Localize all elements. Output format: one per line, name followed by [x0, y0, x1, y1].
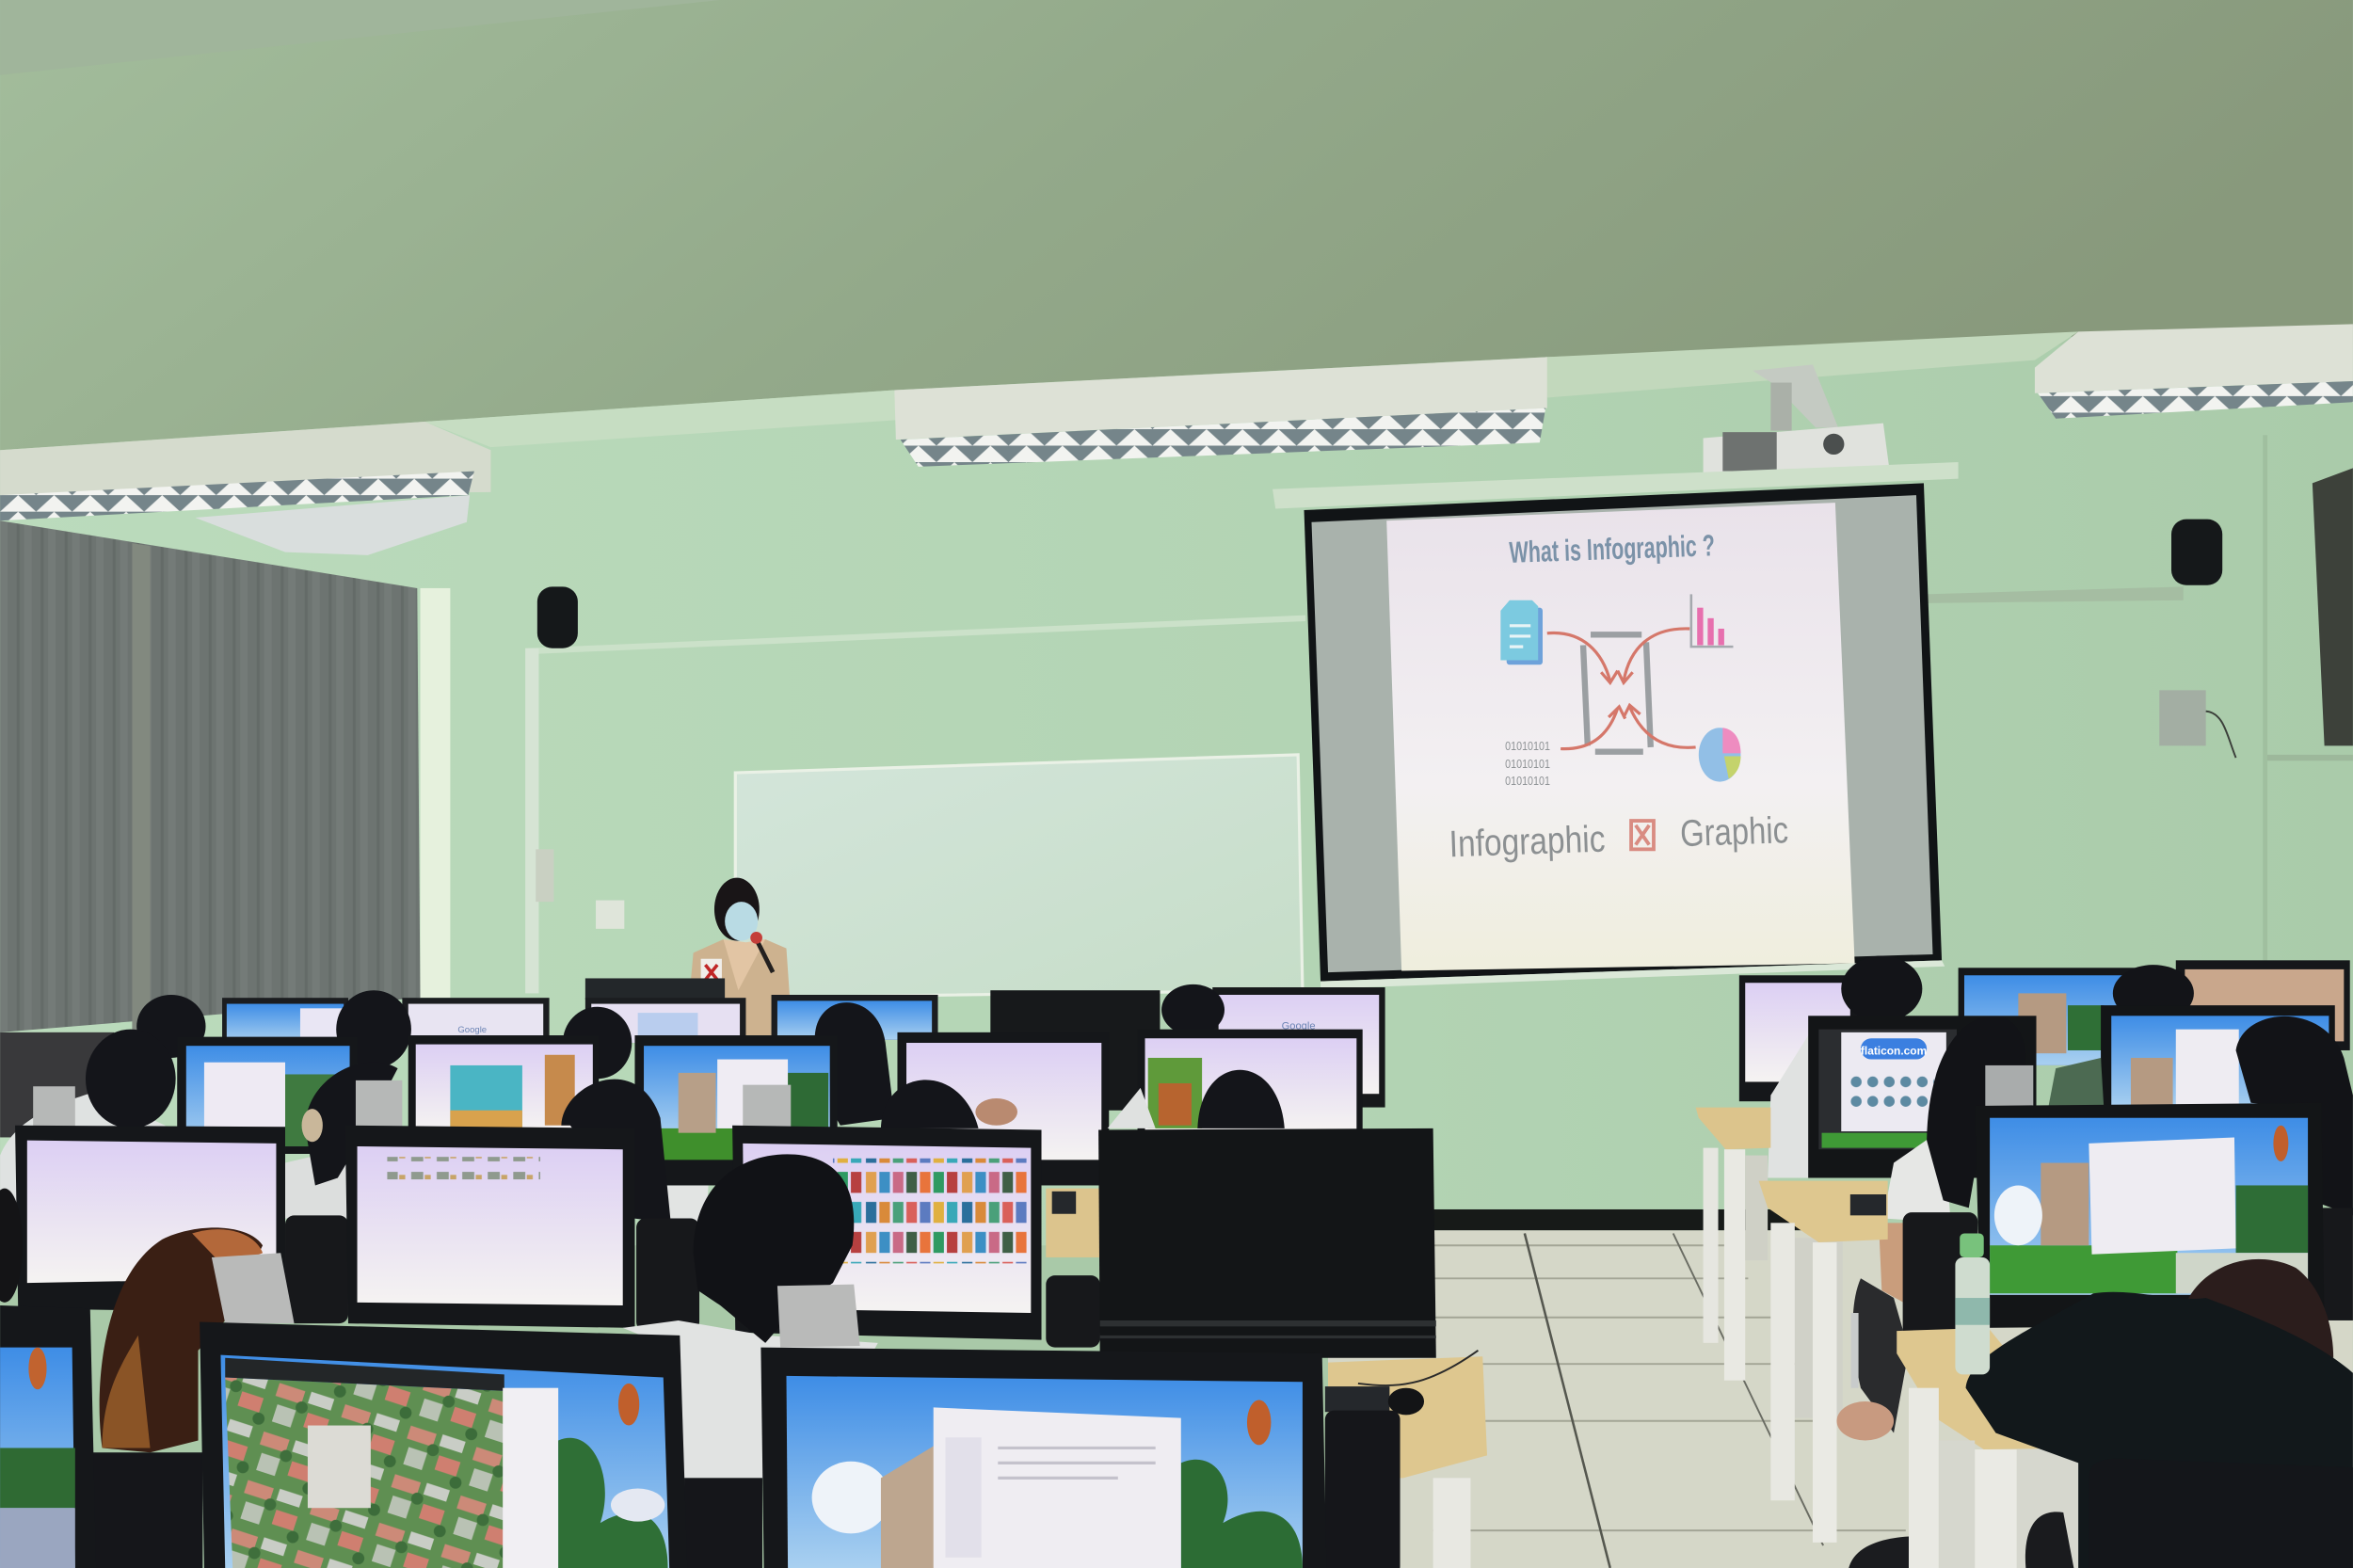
monitor A4: [772, 995, 938, 1040]
monitor R5: [2048, 1005, 2335, 1111]
keyboard: [1325, 1386, 1389, 1412]
row B students: [0, 1030, 1285, 1245]
monitor A1: [222, 998, 348, 1043]
slide label: Graphic: Graphic: [1679, 809, 1789, 855]
floor: [1328, 1230, 2353, 1568]
monitor A6 with Google page: Google: [1282, 1021, 1316, 1032]
head R2: [2113, 965, 2194, 1022]
back row students: [136, 984, 1225, 1126]
student in front of monitor C3: [623, 1154, 878, 1478]
right block back monitors: [1739, 956, 2350, 1177]
back row monitors: [0, 987, 1385, 1137]
curtain: [0, 520, 450, 1032]
baseboard: [1433, 1209, 1883, 1230]
mouse: [1388, 1388, 1424, 1415]
student left: [0, 1030, 177, 1215]
front chairs: [90, 1411, 1401, 1568]
monitor R2: [1959, 968, 2141, 1065]
icon: document: [1500, 600, 1543, 664]
monitor C3 with thumbnails: [732, 1126, 1042, 1340]
ceiling light left: [0, 422, 490, 520]
front monitor left: [0, 1305, 96, 1568]
monitor R4 with flaticon page: flaticon.com: [1861, 1045, 1927, 1058]
student long black hair at R4: [1879, 1016, 2033, 1305]
keyboard: [1850, 1194, 1886, 1215]
icon: bar chart: [1691, 594, 1733, 647]
monitor R3: [2176, 960, 2350, 1050]
monitor B4 browser: [897, 1032, 1109, 1185]
speaker left: [537, 586, 578, 648]
slide label: Infographic: Infographic: [1449, 819, 1606, 865]
student ponytail: [1108, 1070, 1285, 1128]
monitor A3: [585, 998, 745, 1043]
student resting head on desk: [1966, 1259, 2353, 1568]
ceiling: [0, 0, 2353, 450]
icon: pie chart: [1699, 728, 1740, 782]
water bottle: [1955, 1233, 1990, 1374]
air conditioner: [195, 495, 470, 555]
trees: [558, 1438, 668, 1568]
emblem: [618, 1384, 639, 1426]
projected slide: [1386, 503, 1855, 970]
monitor A2 with Google page: [402, 998, 550, 1043]
door panel right: [2263, 435, 2353, 960]
projector mount: [1753, 364, 1838, 431]
projection screen: [1305, 483, 1945, 989]
centre frame with arrows: [1547, 629, 1696, 752]
student long hair: [561, 1080, 709, 1245]
icon: cross box: [1631, 821, 1654, 849]
emblem: [1247, 1400, 1271, 1445]
monitor A6 with Google page: [1212, 987, 1385, 1108]
desk right one: [1696, 1108, 1770, 1381]
centre-right desk: [1325, 1351, 1487, 1568]
student raising hand: [881, 1080, 1017, 1128]
projector: [1704, 424, 1889, 483]
monitor C4 off: [1098, 1128, 1436, 1358]
desk right two: [1759, 1181, 1888, 1543]
wall: [0, 345, 2353, 1245]
trees: [1181, 1460, 1303, 1568]
front monitor centre with file window: [760, 1348, 1326, 1568]
desk right three: [1897, 1328, 2086, 1568]
cabinet: [0, 1032, 114, 1137]
shirt R1: [1768, 1035, 1816, 1177]
front monitor centre-left with aerial photo: [200, 1322, 687, 1568]
monitor A5 off: [990, 990, 1160, 1111]
monitor B5 game page: [1138, 1030, 1363, 1131]
binary digits: [1505, 739, 1550, 788]
chair right: [1849, 1208, 2353, 1568]
paper slips row B: [33, 1080, 791, 1128]
whiteboard: [735, 755, 1303, 998]
monitor A2 with Google page: Google: [457, 1025, 487, 1035]
monitor R6 with wallpaper: [1975, 1103, 2325, 1328]
front right chair: [2025, 1459, 2353, 1568]
clouds: [812, 1462, 889, 1533]
wall switches: [536, 849, 624, 929]
head R1: [1841, 956, 1922, 1022]
student hair at R5: [2236, 1016, 2353, 1215]
binary digits: 01010101: [1505, 757, 1550, 771]
monitor B2 game page: [408, 1035, 599, 1131]
monitor C1: [15, 1126, 285, 1313]
monitor B1 wallpaper: [177, 1037, 358, 1154]
row C chairs: [285, 1215, 1100, 1348]
ceiling light right: [2035, 324, 2353, 419]
monitor C2: [345, 1126, 634, 1328]
file window: [934, 1407, 1181, 1568]
screen roller: [1273, 462, 1959, 508]
podium monitor: [585, 978, 725, 1000]
row B monitors: [177, 1030, 1363, 1185]
aerial photo window: [225, 1358, 507, 1568]
student with hair clip: [285, 1063, 398, 1219]
binary digits: 01010101: [1505, 774, 1550, 788]
centre desk: [1046, 1189, 1106, 1257]
student foot: [1836, 1401, 1894, 1440]
wall box with cable: [2159, 690, 2236, 758]
speaker right: [2171, 520, 2222, 585]
binary digits: 01010101: [1505, 739, 1550, 753]
monitor B3 wallpaper: [634, 1035, 838, 1185]
monitor R4 with flaticon page: [1808, 1016, 2037, 1177]
slide title: What is Infographic ?: [1509, 528, 1715, 569]
student far left edge: [0, 1189, 23, 1303]
building: [881, 1444, 938, 1568]
student with brown hair: [100, 1227, 263, 1452]
white panel: [503, 1388, 558, 1568]
wall rail and conduit: [525, 586, 2184, 993]
paper slips row C: [212, 1253, 860, 1348]
monitor R1: [1739, 975, 1859, 1101]
presenter: [686, 878, 792, 1035]
ceiling light centre: [894, 357, 1547, 467]
file thumbnails: [387, 1157, 540, 1179]
